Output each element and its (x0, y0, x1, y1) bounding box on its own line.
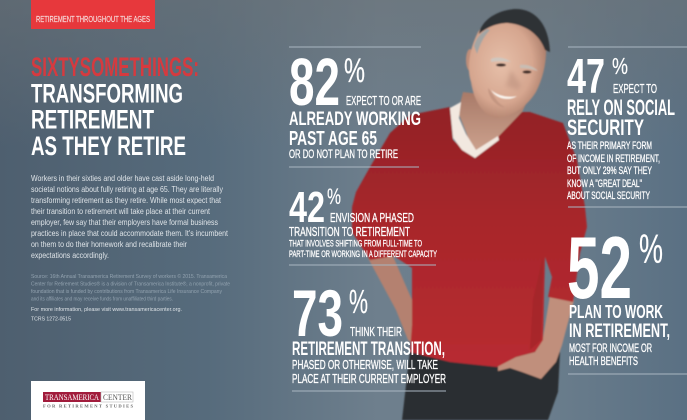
stat: 47%: 47 (567, 50, 605, 104)
source note: Center for Retirement Studies® is a division of Transamerica Institute®, a nonprofit, private (31, 280, 230, 288)
logo: Transamerica Center: CENTER (103, 393, 133, 402)
intro text block (31, 173, 228, 260)
intro text block: their transition to retirement will take place at their current (31, 206, 211, 216)
stat: 42%: PART-TIME OR WORKING IN A DIFFERENT CAPACITY (289, 249, 437, 260)
white undershirt collar (450, 102, 499, 158)
stat: 47%: KNOW A "GREAT DEAL" (567, 178, 642, 190)
stat: 52% (567, 218, 687, 374)
trousers (402, 350, 560, 420)
stat: 82%: 82 (289, 45, 340, 120)
stat: 73% (292, 276, 446, 391)
stat: 73%: 73 (292, 276, 343, 350)
tag: series label (31, 0, 155, 29)
stat: 73%: RETIREMENT TRANSITION, (292, 338, 445, 360)
title: TRANSFORMING (31, 78, 183, 108)
title: AS THEY RETIRE (31, 131, 186, 161)
intro text block: practices in place that could accommodate them. It's incumbent (31, 228, 228, 238)
stat: 52%: HEALTH BENEFITS (569, 356, 638, 368)
intro text block: societal notions about fully retiring at age 65. They are literally (31, 184, 224, 194)
source note: and its affiliates and may receive funds from unaffiliated third parties. (31, 296, 173, 302)
logo: Transamerica Center: FOR RETIREMENT STUDIES (43, 404, 133, 408)
right forearm and hand (498, 295, 574, 379)
hair (479, 9, 550, 52)
stat: 42%: TRANSITION TO RETIREMENT (289, 224, 410, 239)
sweater (352, 107, 587, 367)
intro text block: expectations accordingly. (31, 250, 109, 260)
intro text block: Workers in their sixties and older have cast aside long-held (31, 173, 214, 183)
stat: 82%: PAST AGE 65 (289, 128, 377, 150)
source note: TCRS 1272-0515 (31, 316, 71, 322)
stat: 82%: ALREADY WORKING (289, 108, 421, 130)
stat: 82%: EXPECT TO OR ARE (346, 94, 421, 108)
stat: 47%: % (612, 53, 628, 79)
stat: 82%: % (344, 52, 365, 90)
tag: series label: RETIREMENT THROUGHOUT THE AGES (36, 14, 150, 24)
sweater lower shadow (530, 257, 543, 350)
stat: 73%: THINK THEIR (350, 325, 402, 339)
source note: Source: 16th Annual Transamerica Retirement Survey of workers © 2015. Transamerica (31, 273, 227, 280)
stat: 47%: SECURITY (567, 115, 644, 140)
ear (466, 49, 474, 71)
grey temple (474, 29, 490, 54)
source note (31, 273, 230, 322)
stat: 73%: PHASED OR OTHERWISE, WILL TAKE (292, 358, 438, 372)
stat: 42%: 42 (289, 183, 325, 232)
title (31, 52, 199, 161)
left forearm (368, 254, 416, 345)
facial features (488, 58, 538, 107)
photo: smiling man in red sweater (352, 9, 587, 420)
stat: 42% (289, 183, 437, 265)
source note: For more information, please visit www.transamericacenter.org. (31, 307, 182, 313)
intro text block: employer, few say that their employers have formal business (31, 217, 218, 227)
stat: 47% (567, 47, 687, 207)
stat: 52%: % (639, 226, 663, 272)
logo: Transamerica Center (31, 381, 145, 420)
intro text block: transforming retirement as they retire. While most expect that (31, 195, 221, 205)
head (469, 20, 546, 118)
neck (458, 92, 528, 156)
stat: 47%: EXPECT TO (613, 82, 657, 96)
title: SIXTYSOMETHINGS: (31, 52, 199, 82)
stat: 42%: % (327, 184, 341, 209)
stat: 82%: OR DO NOT PLAN TO RETIRE (289, 147, 398, 161)
title: RETIREMENT (31, 104, 154, 134)
stat: 73%: PLACE AT THEIR CURRENT EMPLOYER (292, 372, 446, 386)
stat: 73%: % (349, 283, 368, 320)
stat: 82% (289, 45, 421, 167)
source note: foundation that is funded by contributions from Transamerica Life Insurance Company (31, 289, 222, 295)
stat: 52%: 52 (567, 218, 632, 317)
logo: Transamerica Center: TRANSAMERICA (45, 393, 99, 402)
stat: 42%: ENVISION A PHASED (330, 210, 414, 225)
stat: 42%: THAT INVOLVES SHIFTING FROM FULL-TIME TO (289, 238, 422, 250)
intro text block: on them to do their homework and recalibrate their (31, 239, 187, 249)
